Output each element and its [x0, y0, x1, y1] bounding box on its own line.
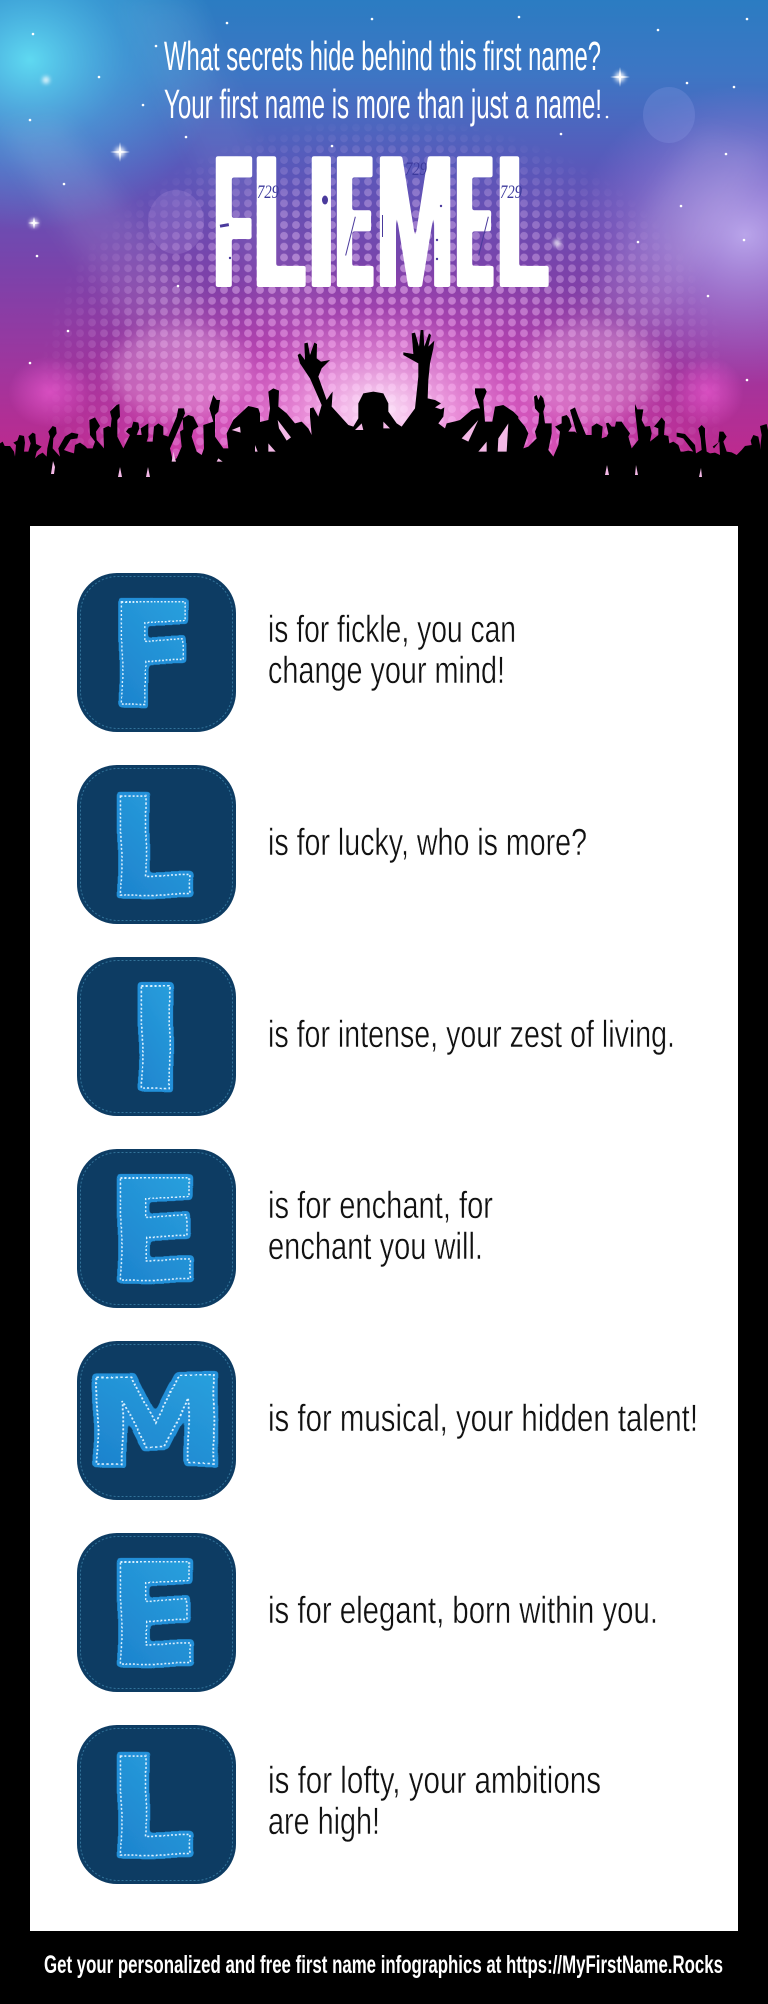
row: E is for elegant: [77, 1533, 658, 1698]
icon: letter L: [77, 765, 236, 927]
row: E is for enchant: [77, 1149, 493, 1314]
text: fickle: change your mind!: [268, 650, 505, 692]
stars: [28, 16, 748, 381]
text: enchant: is for enchant, for: [268, 1185, 493, 1227]
text: enchant: [268, 1185, 493, 1268]
text: lofty: is for lofty, your ambitions: [268, 1760, 601, 1802]
row: I is for intense: [77, 957, 675, 1122]
icon: letter I: I: [128, 958, 183, 1122]
title: FLIEMEL: E: [457, 116, 492, 328]
icon: letter F: [77, 573, 236, 738]
icon: letter F: F: [110, 575, 196, 738]
row: L is for lofty: [77, 1725, 601, 1887]
crowd silhouette: [0, 330, 768, 532]
icon: letter L: L: [109, 768, 193, 927]
title: FLIEMEL: L: [498, 115, 547, 327]
row: F is for fickle: [77, 573, 516, 738]
icon: letter E: [77, 1149, 236, 1314]
concert background: [0, 0, 768, 620]
icon: letter M: M: [84, 1353, 227, 1493]
row: L is for lucky: [77, 765, 587, 927]
icon: letter I: [77, 957, 236, 1122]
icon: letter E: [77, 1533, 236, 1698]
title: FLIEMEL: I: [310, 116, 332, 328]
heading: two-line question: [164, 33, 602, 127]
text: lofty: [268, 1760, 601, 1843]
icon: letter L: L: [109, 1728, 193, 1887]
white content panel: [30, 526, 738, 1931]
icon: letter L: [77, 1725, 236, 1887]
title: FLIEMEL: 729: [500, 182, 522, 203]
title: FLIEMEL: 729: [405, 159, 427, 180]
title: FLIEMEL: L: [255, 115, 304, 327]
title: FLIEMEL: E: [337, 116, 372, 328]
text: fickle: is for fickle, you can: [268, 609, 516, 651]
icon: letter E: E: [109, 1150, 200, 1314]
text: fickle: [268, 609, 516, 692]
row: M is for musical: [77, 1341, 698, 1500]
title: FLIEMEL: M: [376, 115, 455, 327]
text: lucky: is for lucky, who is more?: [268, 822, 587, 864]
title: FLIEMEL: [216, 115, 547, 328]
title: FLIEMEL: F: [216, 115, 250, 328]
text: enchant: enchant you will.: [268, 1226, 483, 1268]
icon: letter E: E: [109, 1534, 200, 1698]
title: FLIEMEL: 729: [257, 182, 279, 203]
text: lofty: are high!: [268, 1801, 380, 1843]
text: elegant: is for elegant, born within you.: [268, 1590, 658, 1632]
